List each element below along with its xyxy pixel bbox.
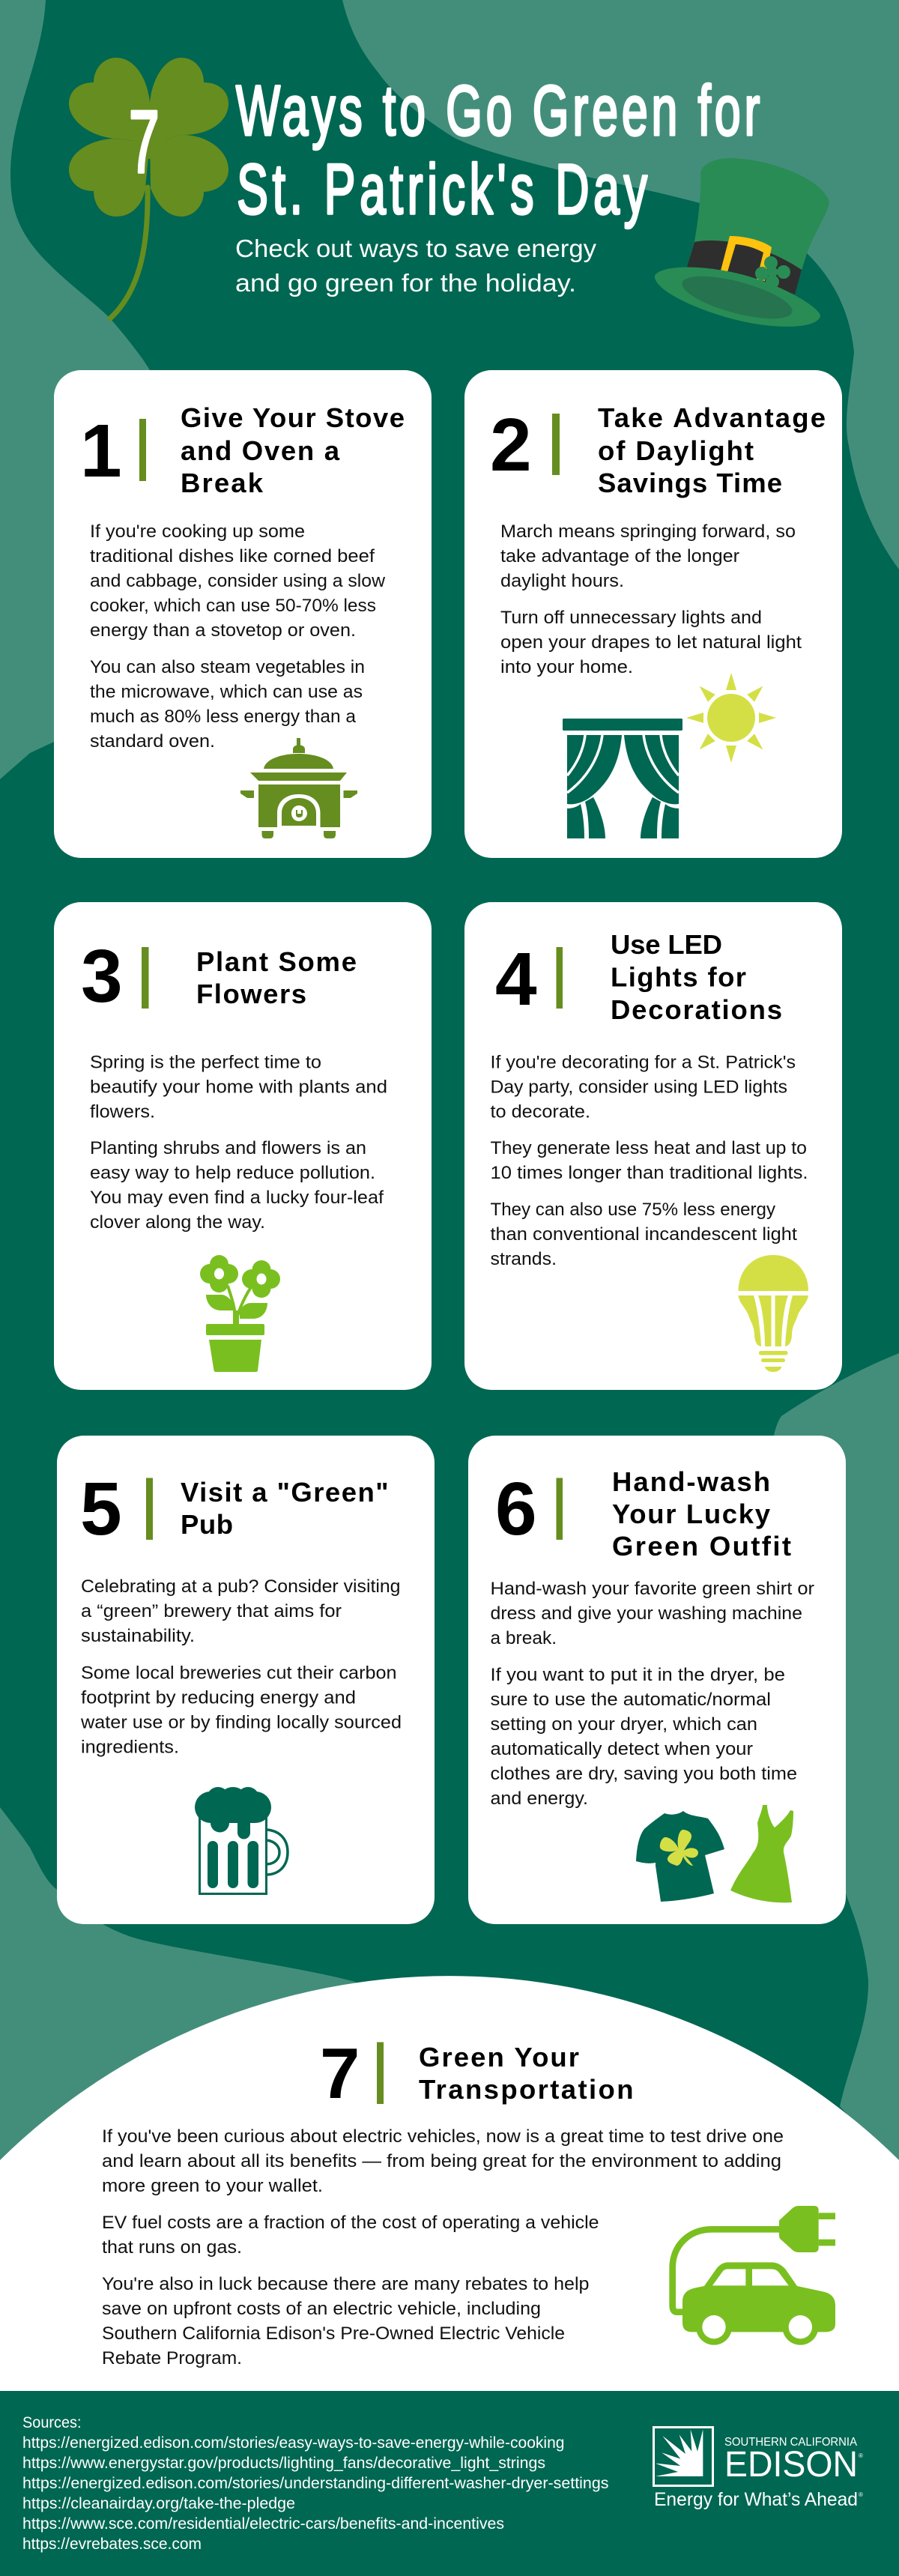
title: St. Patrick's Day	[237, 150, 648, 229]
body 6: Hand-wash your favorite green shirt or	[490, 1579, 814, 1599]
body 2: Turn off unnecessary lights and	[500, 608, 762, 628]
sources list: https://energized.edison.com/stories/easy-ways-to-save-energy-while-cooking	[22, 2434, 565, 2452]
body 5: ingredients.	[81, 1737, 179, 1758]
body 1: cooker, which can use 50-70% less	[90, 596, 376, 616]
icon: leprechaun hat	[655, 158, 829, 327]
body 1: traditional dishes like corned beef	[90, 546, 375, 566]
body 5: a “green” brewery that aims for	[81, 1601, 342, 1621]
title	[236, 71, 760, 229]
body 2: open your drapes to let natural light	[500, 632, 802, 653]
heading 3: Flowers	[196, 979, 306, 1009]
subtitle: Check out ways to save energy	[235, 235, 597, 262]
number 5: 5	[80, 1467, 122, 1551]
logo: Southern California Edison: SOUTHERN CALIFORNIA	[724, 2436, 857, 2449]
heading 1: Give Your Stove	[181, 402, 405, 433]
body 6	[490, 1579, 814, 1809]
panel: tip 6 hand-wash outfit	[468, 1436, 846, 1924]
body 2	[500, 521, 802, 677]
heading 6: Your Lucky	[612, 1499, 771, 1529]
body 5: sustainability.	[81, 1626, 195, 1646]
body 5: water use or by finding locally sourced	[80, 1713, 402, 1732]
body 5: Celebrating at a pub? Consider visiting	[81, 1576, 400, 1597]
subtitle: and go green for the holiday.	[235, 269, 576, 297]
body 7: more green to your wallet.	[102, 2176, 323, 2196]
body 3: Planting shrubs and flowers is an	[90, 1138, 366, 1158]
body 3: beautify your home with plants and	[90, 1077, 387, 1097]
body 3: easy way to help reduce pollution.	[90, 1163, 375, 1183]
body 3	[90, 1052, 387, 1233]
body 6: sure to use the automatic/normal	[490, 1690, 771, 1710]
number 7: 7	[320, 2034, 360, 2114]
heading 5	[181, 1477, 388, 1540]
heading 1: and Oven a	[181, 435, 340, 466]
body 4: If you're decorating for a St. Patrick's	[490, 1052, 796, 1073]
heading 2: Savings Time	[598, 468, 782, 498]
body 4: They generate less heat and last up to	[490, 1138, 807, 1158]
heading 4: Decorations	[611, 994, 782, 1025]
body 6: a break.	[490, 1628, 557, 1648]
body 1: If you're cooking up some	[90, 521, 305, 542]
body 1: You can also steam vegetables in	[90, 657, 365, 677]
icon: slow cooker	[240, 738, 357, 838]
sources list	[22, 2414, 608, 2553]
heading 5: Visit a "Green"	[181, 1477, 388, 1508]
body 1	[90, 521, 385, 752]
body 7: Rebate Program.	[102, 2348, 242, 2368]
sources list: Sources:	[22, 2414, 81, 2431]
title: Ways to Go Green for	[236, 71, 760, 151]
body 6: If you want to put it in the dryer, be	[490, 1665, 785, 1685]
icon: beer mug	[195, 1787, 288, 1894]
number 4: 4	[495, 937, 537, 1021]
body 4: than conventional incandescent light	[490, 1224, 797, 1245]
heading 4	[611, 929, 782, 1025]
body 4: Day party, consider using LED lights	[490, 1077, 787, 1097]
panel: tip 2 daylight savings	[464, 370, 842, 858]
body 7: If you've been curious about electric vehicles, now is a great time to test drive one	[102, 2126, 784, 2147]
icon: potted flowers	[200, 1255, 280, 1372]
sources list: https://www.energystar.gov/products/lighting_fans/decorative_light_strings	[22, 2455, 545, 2472]
heading 3: Plant Some	[196, 946, 357, 977]
body 6: dress and give your washing machine	[490, 1603, 802, 1624]
icon: sun	[686, 673, 776, 763]
heading 4: Lights for	[611, 962, 746, 992]
body 6: automatically detect when your	[490, 1739, 753, 1759]
icon: electric car and plug	[673, 2206, 835, 2345]
heading 4: Use LED	[611, 929, 722, 960]
body 4: They can also use 75% less energy	[490, 1200, 776, 1220]
logo: Southern California Edison: Energy for What’s Ahead	[654, 2489, 858, 2510]
body 1: the microwave, which can use as	[90, 682, 363, 702]
body 3: flowers.	[90, 1101, 155, 1122]
body 7: Southern California Edison's Pre-Owned Electric Vehicle	[102, 2323, 565, 2344]
body 2: daylight hours.	[500, 571, 624, 591]
heading 1	[181, 402, 405, 498]
number 2: 2	[490, 403, 532, 487]
heading 2: Take Advantage	[598, 402, 826, 433]
panel: tip 3 plant flowers	[54, 902, 432, 1390]
number 3: 3	[81, 934, 123, 1018]
heading 2	[598, 402, 826, 498]
icon: LED bulb	[739, 1255, 808, 1372]
body 7: save on upfront costs of an electric vehicle, including	[102, 2299, 541, 2319]
number 6: 6	[495, 1467, 537, 1551]
icon: dress	[730, 1805, 793, 1902]
panel: tip 5 green pub	[57, 1436, 435, 1924]
body 1: standard oven.	[90, 731, 215, 752]
body 1: and cabbage, consider using a slow	[90, 571, 385, 591]
body 1: much as 80% less energy than a	[90, 707, 356, 727]
logo: Southern California Edison: ®	[859, 2452, 863, 2459]
body 4	[490, 1052, 808, 1269]
heading 7: Transportation	[419, 2074, 634, 2105]
body 3: Spring is the perfect time to	[90, 1052, 321, 1073]
sources list: https://www.sce.com/residential/electric-cars/benefits-and-incentives	[22, 2515, 504, 2533]
body 2: take advantage of the longer	[500, 546, 739, 566]
body 6: setting on your dryer, which can	[490, 1714, 757, 1735]
body 6: clothes are dry, saving you both time	[490, 1764, 797, 1784]
subtitle	[235, 235, 597, 297]
footer band	[0, 2391, 899, 2576]
heading 7: Green Your	[419, 2042, 579, 2072]
sources list: https://cleanairday.org/take-the-pledge	[22, 2495, 295, 2512]
panel: tip 4 LED lights	[464, 902, 842, 1390]
body 5: Some local breweries cut their carbon	[81, 1663, 397, 1683]
heading 3	[196, 946, 357, 1009]
body 7: that runs on gas.	[102, 2237, 242, 2258]
body 2: into your home.	[500, 657, 633, 677]
body 4: to decorate.	[490, 1101, 590, 1122]
heading 1: Break	[181, 468, 264, 498]
heading 6: Hand-wash	[612, 1466, 770, 1497]
logo: Southern California Edison	[653, 2428, 863, 2510]
body 5	[80, 1576, 402, 1758]
body 2: March means springing forward, so	[500, 521, 796, 542]
icon: four-leaf clover with number 7	[69, 58, 228, 318]
icon: curtains	[563, 719, 682, 838]
number 1: 1	[80, 409, 122, 493]
body 7: and learn about all its benefits — from being great for the environment to adding	[102, 2151, 781, 2171]
body 7: EV fuel costs are a fraction of the cost of operating a vehicle	[102, 2213, 599, 2233]
body 3: You may even find a lucky four-leaf	[90, 1188, 384, 1208]
logo: Southern California Edison: EDISON	[724, 2445, 858, 2485]
body 3: clover along the way.	[90, 1212, 265, 1233]
body 7	[102, 2126, 784, 2368]
body 1: energy than a stovetop or oven.	[90, 620, 356, 641]
body 7: You're also in luck because there are many rebates to help	[102, 2274, 590, 2294]
panel: tip 7 green transportation	[0, 1976, 899, 2391]
body 5: footprint by reducing energy and	[81, 1687, 356, 1708]
heading 5: Pub	[181, 1509, 233, 1540]
logo: Southern California Edison: ®	[859, 2491, 863, 2498]
sources list: https://energized.edison.com/stories/understanding-different-washer-dryer-settings	[22, 2475, 608, 2492]
body 4: strands.	[490, 1249, 557, 1269]
heading 2: of Daylight	[598, 435, 754, 466]
heading 6	[612, 1466, 791, 1561]
panel: tip 1 stove and oven	[54, 370, 432, 858]
icon: t-shirt with clover	[636, 1811, 724, 1902]
sources list: https://evrebates.sce.com	[22, 2536, 202, 2553]
heading 6: Green Outfit	[612, 1531, 791, 1561]
icon: four-leaf clover with number 7: 7	[129, 92, 160, 191]
body 4: 10 times longer than traditional lights.	[490, 1163, 808, 1183]
body 6: and energy.	[490, 1789, 588, 1809]
heading 7	[419, 2042, 634, 2105]
